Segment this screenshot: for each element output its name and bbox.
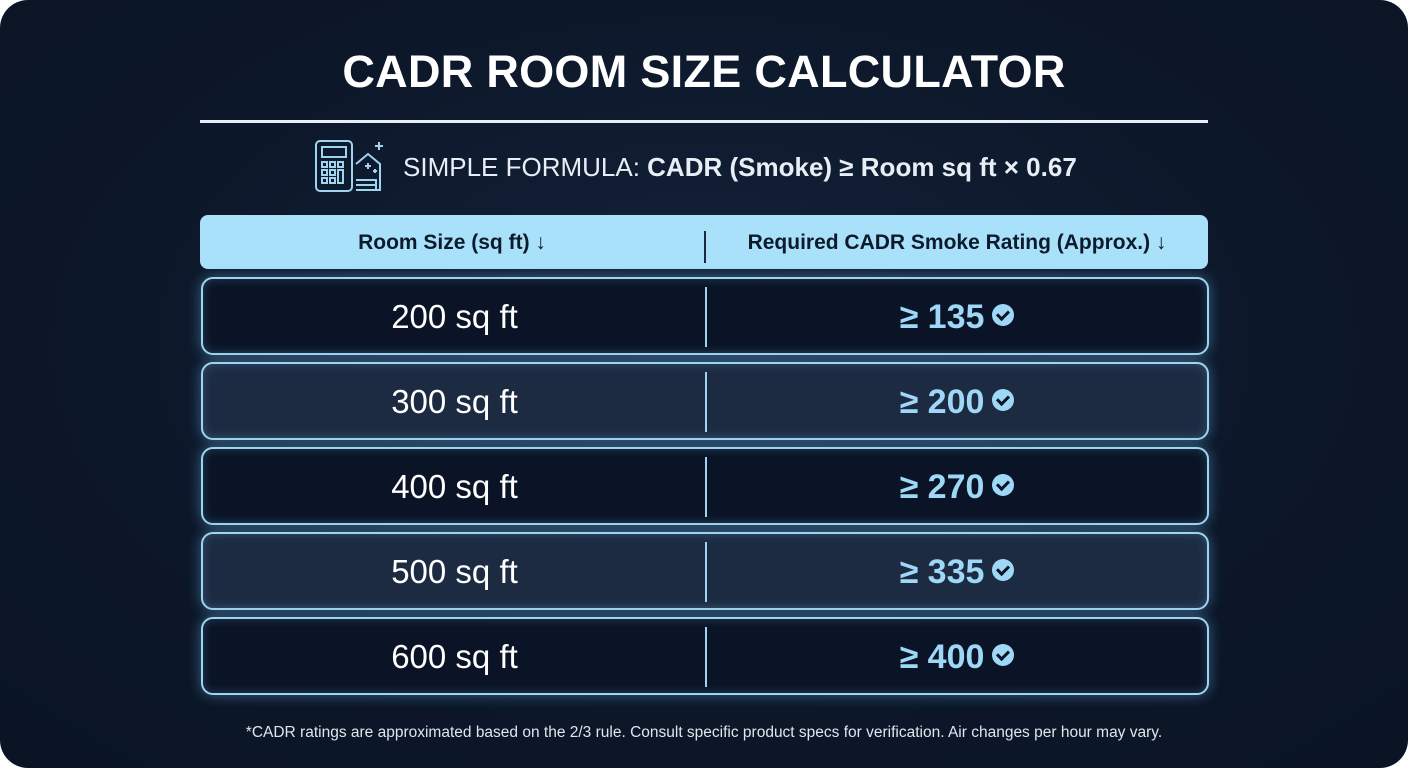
- row: 500: [201, 532, 1209, 610]
- row: 300: ≥ 200: [900, 383, 984, 421]
- row: 600: [201, 617, 1209, 695]
- row: 400: [201, 447, 1209, 525]
- row: 300: [201, 362, 1209, 440]
- table header: [200, 215, 1208, 269]
- row: 300: 300 sq ft: [391, 383, 518, 420]
- row: 400: ≥ 270: [900, 468, 984, 506]
- row: 200: [201, 277, 1209, 355]
- row: 600: ≥ 400: [900, 638, 984, 676]
- formula text: SIMPLE FORMULA: CADR (Smoke) ≥ Room sq ft × 0.67: [403, 152, 1077, 182]
- table header: Room Size (sq ft) ↓: [358, 231, 546, 254]
- row: 200: 200 sq ft: [391, 298, 518, 335]
- title: CADR ROOM SIZE CALCULATOR: [342, 46, 1066, 97]
- row: 600: 600 sq ft: [391, 638, 518, 675]
- row: 400: 400 sq ft: [391, 468, 518, 505]
- icon: calculator with house: [315, 140, 383, 192]
- formula line: [315, 140, 1077, 192]
- row: 200: ≥ 135: [900, 298, 984, 336]
- table header: Required CADR Smoke Rating (Approx.) ↓: [748, 231, 1166, 254]
- row: 500: ≥ 335: [900, 553, 984, 591]
- footnote: *CADR ratings are approximated based on the 2/3 rule. Consult specific product specs for verification. Air changes per hour may vary.: [246, 724, 1162, 741]
- row: 500: 500 sq ft: [391, 553, 518, 590]
